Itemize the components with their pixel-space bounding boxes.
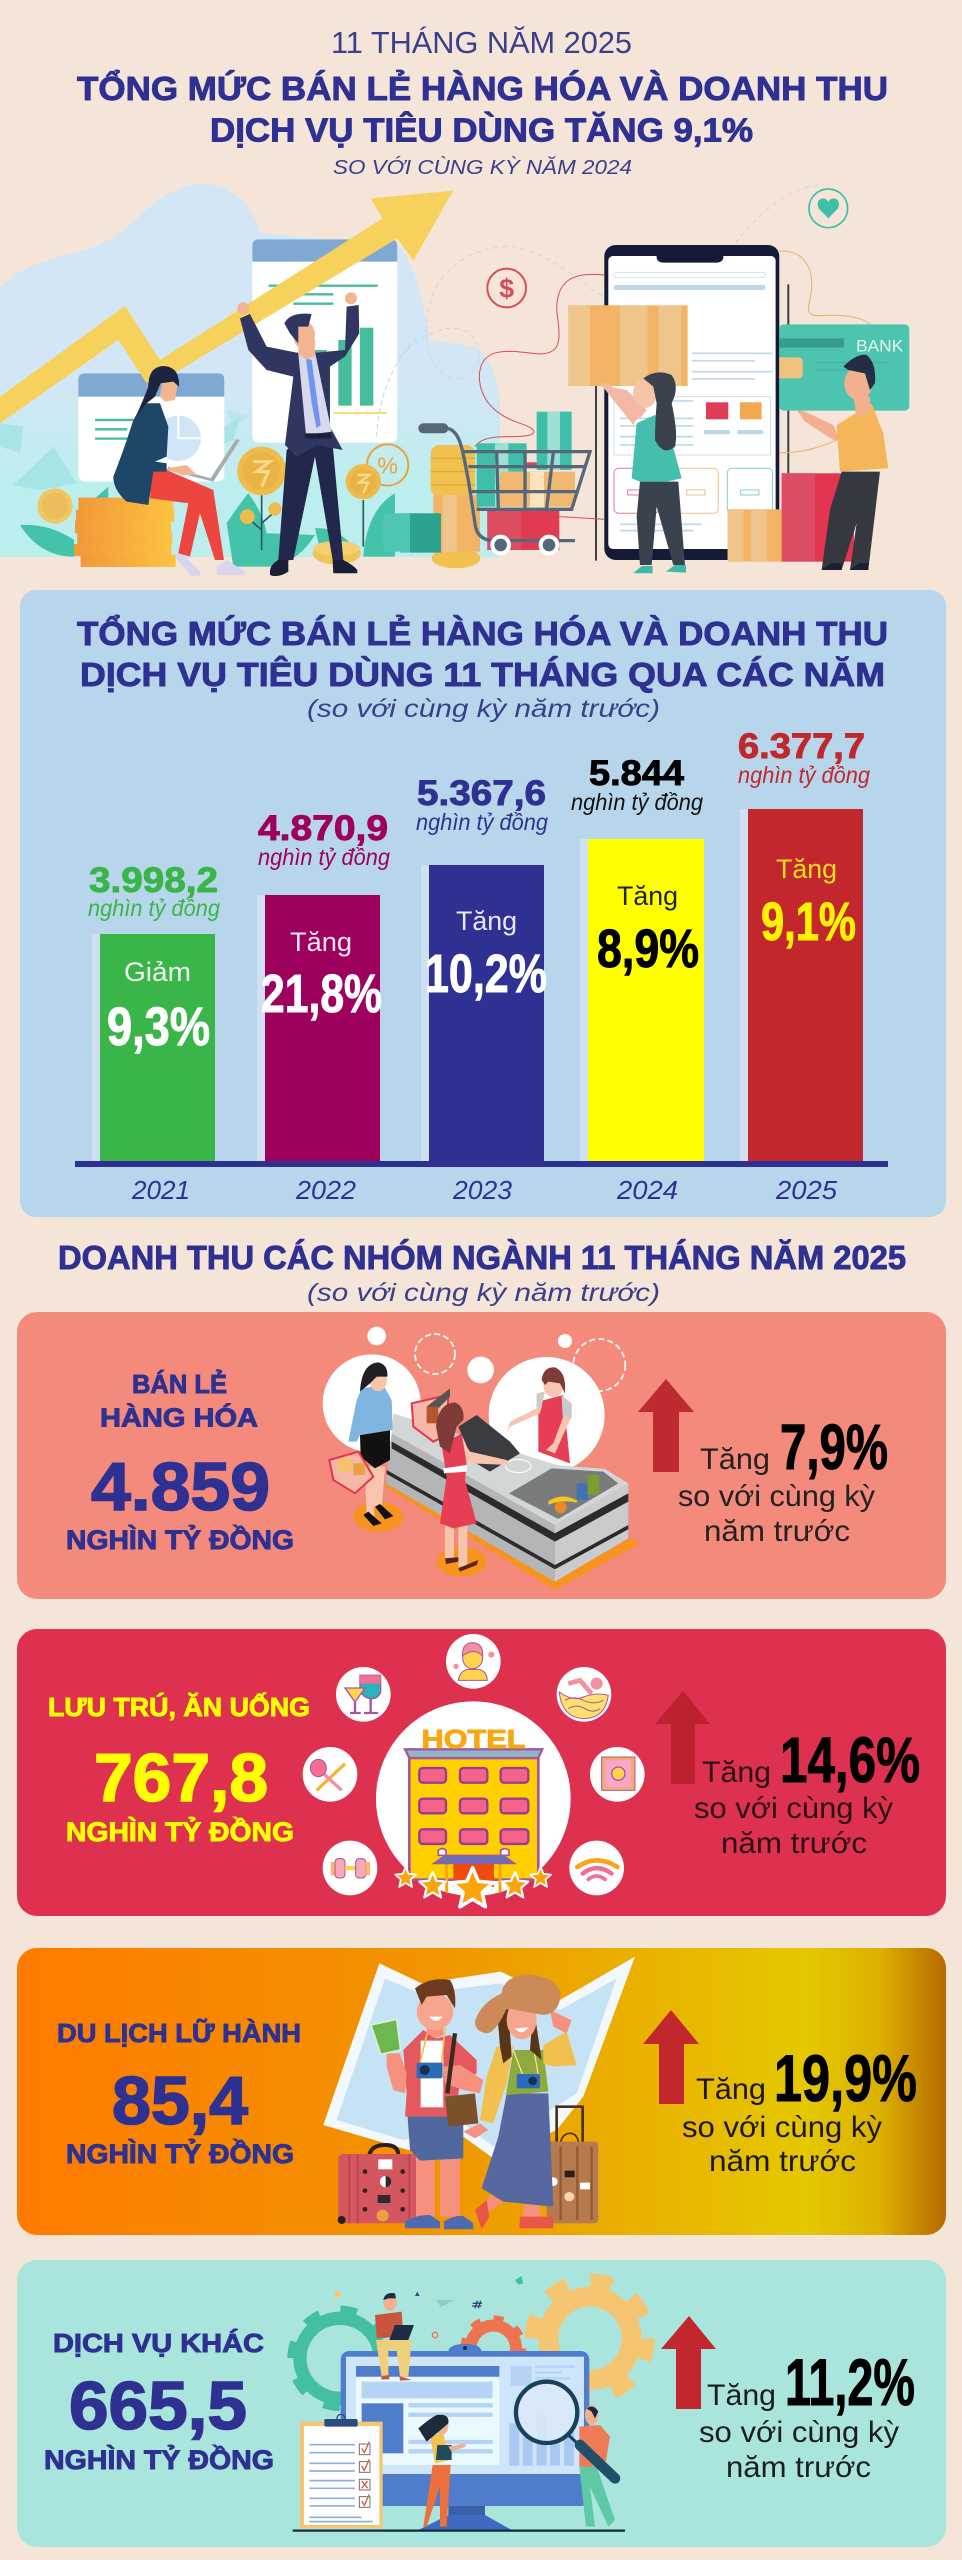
teal box xyxy=(383,513,420,552)
retail label: HÀNG HÓA xyxy=(100,1402,258,1432)
dollar icon xyxy=(487,269,526,307)
accommodation arrow xyxy=(655,1691,710,1784)
travel growth text: 19,9% xyxy=(774,2041,917,2115)
bar 2025: nghìn tỷ đồng xyxy=(738,762,870,788)
teal box xyxy=(400,513,441,553)
accommodation growth text: năm trước xyxy=(721,1827,867,1860)
travel growth text: năm trước xyxy=(709,2145,856,2178)
icon: spa xyxy=(446,1634,501,1689)
travel growth text: so với cùng kỳ xyxy=(682,2111,882,2144)
icon: swimming xyxy=(557,1667,611,1722)
icon: dumbbell xyxy=(323,1841,377,1895)
retail arrow xyxy=(638,1379,694,1472)
retail label: NGHÌN TỶ ĐỒNG xyxy=(66,1523,294,1555)
section heading: (so với cùng kỳ năm trước) xyxy=(307,1279,660,1307)
accommodation label: LƯU TRÚ, ĂN UỐNG xyxy=(48,1692,310,1722)
travel illustration xyxy=(323,1957,635,2229)
bar 2025: 6.377,7 xyxy=(738,727,865,766)
stars xyxy=(395,1867,551,1907)
bar 2021: 3.998,2 xyxy=(89,861,218,900)
dollar icon: $ xyxy=(499,273,514,303)
heart icon xyxy=(809,189,848,228)
retail growth text: 7,9% xyxy=(780,1411,888,1483)
woman presenter xyxy=(418,2415,466,2527)
section heading xyxy=(58,1239,906,1307)
services growth text: so với cùng kỳ xyxy=(699,2416,899,2449)
icon: safe xyxy=(590,1747,645,1802)
panel: other services xyxy=(17,2260,946,2547)
bar 2024 xyxy=(571,754,704,1161)
background hill xyxy=(0,184,500,557)
year labels: 2025 xyxy=(775,1175,838,1205)
header text: SO VỚI CÙNG KỲ NĂM 2024 xyxy=(333,156,632,179)
bar 2022: 4.870,9 xyxy=(258,809,388,848)
chart title: DỊCH VỤ TIÊU DÙNG 11 THÁNG QUA CÁC NĂM xyxy=(80,656,885,693)
year labels: 2021 xyxy=(131,1175,190,1205)
travel growth text xyxy=(682,2041,917,2178)
services growth text: Tăng xyxy=(707,2379,776,2412)
services label: NGHÌN TỶ ĐỒNG xyxy=(44,2443,274,2475)
floor line xyxy=(293,2527,625,2534)
big chart document xyxy=(252,239,397,443)
retail illustration xyxy=(323,1327,640,1590)
parcel box xyxy=(568,305,688,386)
bar 2022: nghìn tỷ đồng xyxy=(258,844,390,870)
services illustration xyxy=(292,2276,647,2531)
connecting curves xyxy=(475,251,870,519)
services label xyxy=(44,2328,274,2475)
bar 2024: 8,9% xyxy=(597,919,699,979)
chart title: (so với cùng kỳ năm trước) xyxy=(307,695,660,723)
bar 2023: 10,2% xyxy=(425,944,547,1004)
year labels xyxy=(131,1175,838,1205)
bar 2021: nghìn tỷ đồng xyxy=(88,895,220,921)
customer man xyxy=(797,355,888,570)
travel label xyxy=(57,2018,301,2169)
travel arrow xyxy=(643,2010,699,2104)
bar 2022: 21,8% xyxy=(261,964,382,1024)
map xyxy=(323,1957,635,2158)
coin tower xyxy=(431,445,480,568)
person with laptop xyxy=(375,2293,414,2381)
services label: DỊCH VỤ KHÁC xyxy=(53,2328,264,2358)
bar 2025: 9,1% xyxy=(761,892,856,952)
pale foliage xyxy=(0,410,250,490)
icon: wifi xyxy=(569,1841,624,1895)
services growth text xyxy=(699,2345,915,2484)
icon: cutlery xyxy=(303,1747,357,1802)
bank card xyxy=(779,324,909,411)
bar 2023: nghìn tỷ đồng xyxy=(416,809,548,835)
bar 2022 xyxy=(257,809,390,1161)
bar 2022: Tăng xyxy=(290,927,352,957)
accommodation label xyxy=(48,1692,310,1847)
bar 2024: Tăng xyxy=(617,881,678,911)
services label: 665,5 xyxy=(69,2368,247,2444)
small accents xyxy=(334,2276,523,2338)
red suitcase xyxy=(338,2145,418,2224)
right hero scene xyxy=(400,185,909,573)
header text: TỔNG MỨC BÁN LẺ HÀNG HÓA VÀ DOANH THU xyxy=(77,70,888,107)
bar 2021: 9,3% xyxy=(107,997,210,1057)
brown suitcase xyxy=(547,2107,598,2223)
travel label: NGHÌN TỶ ĐỒNG xyxy=(66,2137,294,2169)
retail growth text: so với cùng kỳ xyxy=(678,1480,875,1513)
bar 2025: Tăng xyxy=(776,854,837,884)
red and orange boxes xyxy=(728,473,854,562)
panel: accommodation and food xyxy=(17,1629,946,1916)
retail growth text: năm trước xyxy=(704,1515,850,1548)
stack of coins under woman xyxy=(74,498,176,567)
year labels: 2023 xyxy=(452,1175,513,1205)
standing man xyxy=(237,292,359,576)
year labels: 2024 xyxy=(616,1175,678,1205)
panel: yearly chart xyxy=(20,590,946,1217)
travel growth text: Tăng xyxy=(696,2073,766,2106)
chart title: TỔNG MỨC BÁN LẺ HÀNG HÓA VÀ DOANH THU xyxy=(77,615,888,652)
shopping cart xyxy=(418,412,590,553)
accommodation label: NGHÌN TỶ ĐỒNG xyxy=(66,1815,294,1847)
bar 2024: 5.844 xyxy=(589,754,685,793)
services arrow xyxy=(661,2316,716,2409)
retail label xyxy=(66,1369,294,1555)
small document with pie xyxy=(78,373,224,482)
monitor xyxy=(341,2344,589,2530)
travel label: 85,4 xyxy=(112,2063,248,2139)
accommodation growth text: so với cùng kỳ xyxy=(694,1792,893,1825)
accommodation label: 767,8 xyxy=(94,1740,268,1816)
header text xyxy=(77,25,888,179)
accommodation growth text: 14,6% xyxy=(780,1724,920,1796)
chart title xyxy=(77,615,888,723)
hero illustration xyxy=(0,184,909,576)
panel: travel xyxy=(17,1948,946,2235)
bar 2023: 5.367,6 xyxy=(417,774,546,813)
pole xyxy=(596,284,788,561)
hotel illustration xyxy=(303,1634,645,1907)
retail growth text xyxy=(678,1411,888,1548)
hotel building xyxy=(405,1749,542,1892)
retail growth text: Tăng xyxy=(700,1443,770,1476)
bar 2025 xyxy=(738,727,870,1161)
smartphone xyxy=(604,245,779,560)
clipboard xyxy=(300,2414,383,2528)
header text: 11 THÁNG NĂM 2025 xyxy=(331,25,632,60)
services growth text: năm trước xyxy=(726,2451,871,2484)
header text: DỊCH VỤ TIÊU DÙNG TĂNG 9,1% xyxy=(210,112,753,148)
growth arrow xyxy=(0,191,453,423)
gears xyxy=(292,2282,647,2407)
bar 2024: nghìn tỷ đồng xyxy=(571,789,703,815)
axis xyxy=(75,1161,888,1167)
bar 2021 xyxy=(88,861,220,1161)
accommodation growth text: Tăng xyxy=(702,1756,771,1789)
coin plants: % xyxy=(377,452,398,478)
section heading: DOANH THU CÁC NHÓM NGÀNH 11 THÁNG NĂM 2025 xyxy=(58,1239,906,1276)
hotel sign: HOTEL xyxy=(422,1724,526,1754)
bar 2023 xyxy=(416,774,548,1161)
panel: retail xyxy=(17,1312,946,1599)
traveller woman xyxy=(463,1974,577,2229)
bar 2021: Giảm xyxy=(124,957,191,987)
man with magnifier xyxy=(516,2382,615,2527)
coin plants xyxy=(37,444,408,565)
traveller man xyxy=(371,1979,483,2229)
travel label: DU LỊCH LỮ HÀNH xyxy=(57,2018,301,2048)
icon: drinks xyxy=(336,1667,391,1722)
left hero scene xyxy=(0,191,453,576)
shopper woman xyxy=(600,372,686,573)
green leaves xyxy=(20,487,395,567)
year labels: 2022 xyxy=(295,1175,357,1205)
bar 2023: Tăng xyxy=(456,906,517,936)
accommodation growth text xyxy=(694,1724,920,1860)
retail label: BÁN LẺ xyxy=(132,1369,227,1399)
sitting woman xyxy=(113,366,245,576)
bank card: BANK xyxy=(856,337,903,356)
dashed curves xyxy=(400,185,823,378)
retail label: 4.859 xyxy=(91,1449,270,1525)
